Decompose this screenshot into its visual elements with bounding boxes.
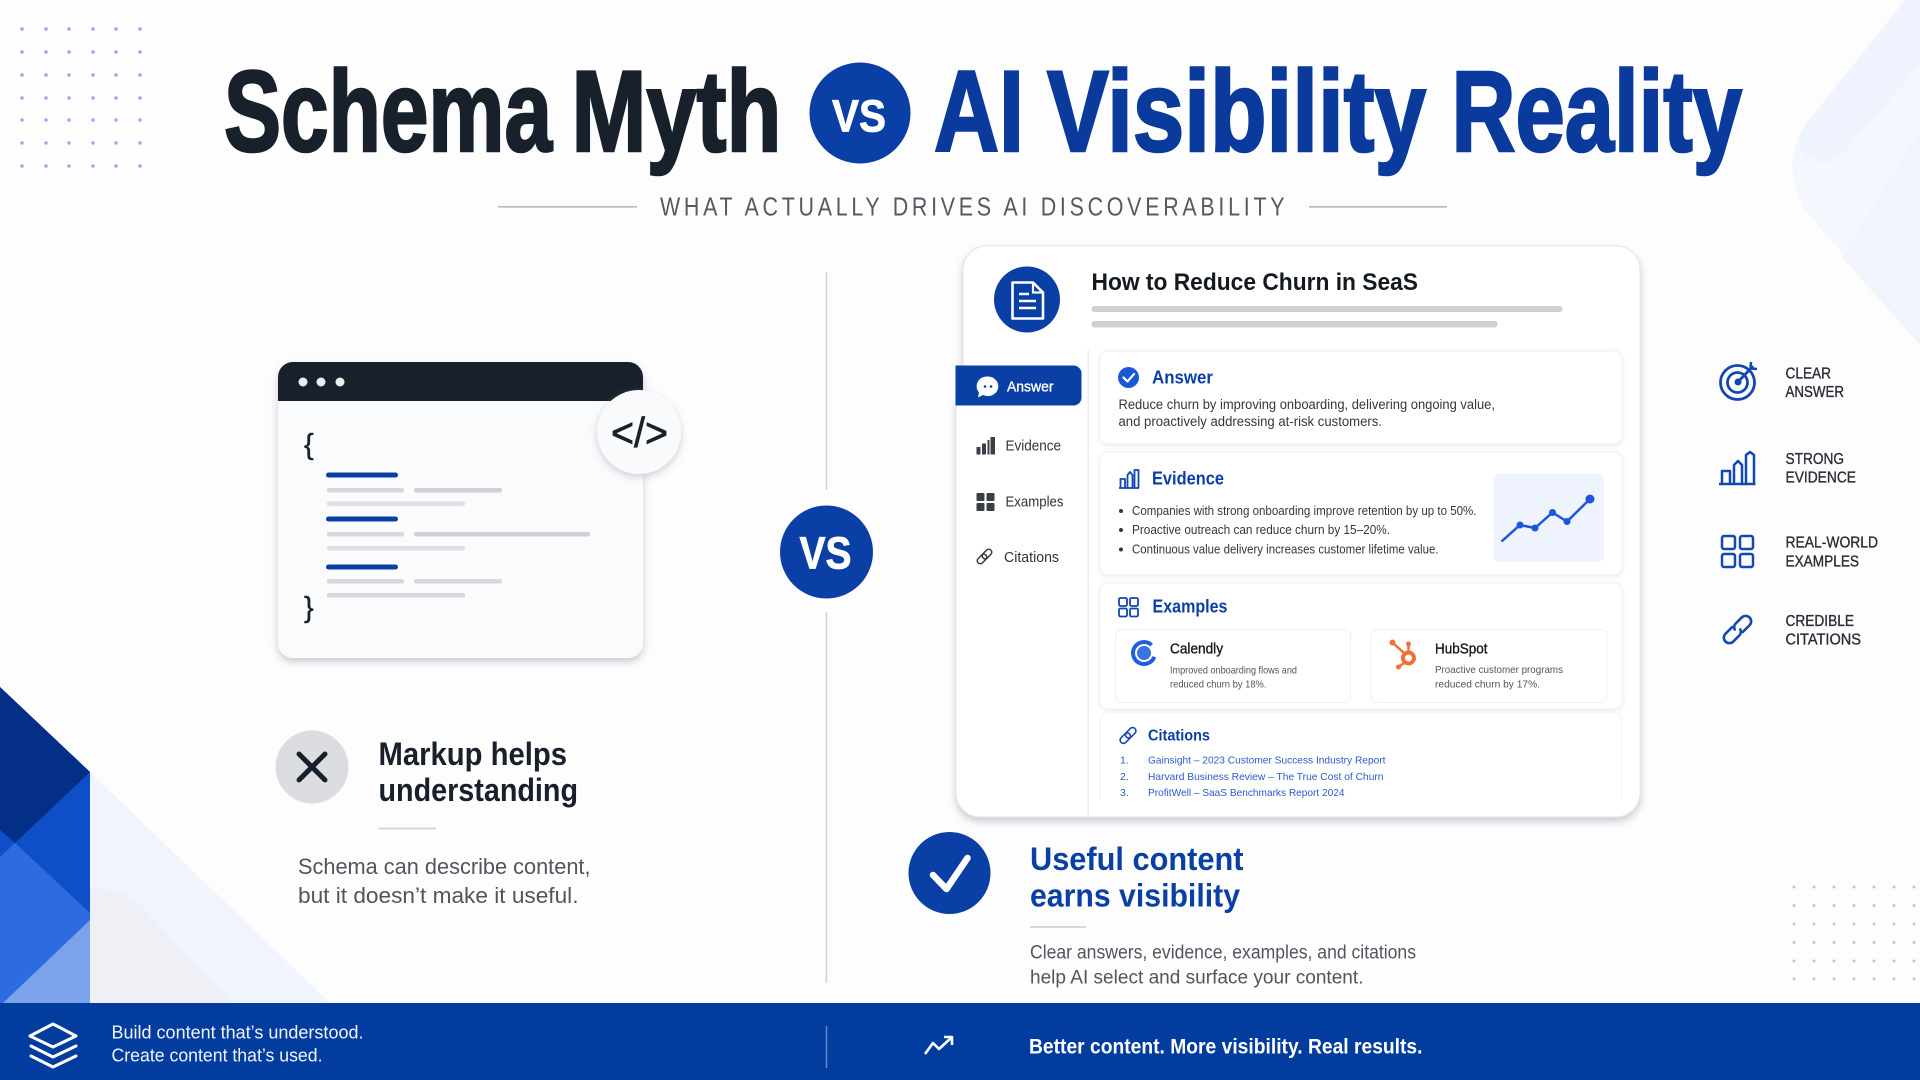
citation list: ProfitWell – SaaS Benchmarks Report 2024 bbox=[1148, 787, 1345, 799]
code lines bbox=[326, 472, 590, 598]
heading: Markup helps bbox=[378, 736, 567, 772]
evidence bullets: Proactive outreach can reduce churn by 15–20%. bbox=[1132, 523, 1390, 537]
heading: Citations bbox=[1148, 728, 1210, 744]
body text bbox=[298, 854, 590, 908]
feature: real-world examples: REAL-WORLD bbox=[1786, 534, 1878, 552]
decoration: top-left dot grid bbox=[20, 27, 142, 168]
answer text: and proactively addressing at-risk customers. bbox=[1118, 414, 1382, 429]
example card: calendly: Improved onboarding flows and bbox=[1170, 664, 1297, 676]
footer left text: Build content that’s understood. bbox=[112, 1022, 364, 1042]
evidence bullets: Companies with strong onboarding improve retention by up to 50%. bbox=[1132, 504, 1476, 518]
icon: trend arrow bbox=[925, 1037, 952, 1054]
icon: target bbox=[1720, 362, 1757, 400]
sidebar: examples tab bbox=[976, 493, 1064, 511]
feature: clear answer: ANSWER bbox=[1786, 384, 1844, 401]
icon: grid bbox=[1119, 598, 1138, 616]
section: evidence bbox=[1100, 452, 1622, 575]
card title: How to Reduce Churn in SeaS bbox=[1092, 269, 1418, 296]
body text: help AI select and surface your content. bbox=[1030, 968, 1364, 988]
heading: understanding bbox=[378, 772, 578, 808]
evidence bullets: Continuous value delivery increases customer lifetime value. bbox=[1132, 542, 1438, 556]
window body bbox=[278, 362, 643, 658]
title: ai visibility reality: AI bbox=[934, 48, 1024, 176]
subtitle: WHAT ACTUALLY DRIVES AI DISCOVERABILITY bbox=[660, 193, 1285, 221]
icon: link bbox=[1119, 726, 1137, 745]
code tag badge: </> bbox=[611, 409, 668, 456]
window title bar bbox=[278, 362, 643, 401]
footer left text bbox=[112, 1022, 364, 1066]
icon: check bbox=[908, 832, 990, 914]
example card: hubspot bbox=[1371, 630, 1607, 702]
example card: hubspot: reduced churn by 17%. bbox=[1435, 678, 1540, 690]
icon: bars bbox=[1119, 470, 1139, 488]
heading: Answer bbox=[1152, 368, 1213, 388]
code closing brace: } bbox=[304, 592, 314, 624]
feature: strong evidence bbox=[1719, 451, 1856, 486]
decoration: bottom-left geometric shapes bbox=[0, 687, 330, 1003]
sidebar: citations tab: Citations bbox=[1004, 550, 1059, 566]
title: schema myth: Myth bbox=[572, 48, 782, 176]
citation list: 3. bbox=[1120, 787, 1129, 799]
center divider with vs badge bbox=[780, 272, 873, 983]
section: examples bbox=[1100, 583, 1622, 709]
line chart bbox=[1494, 474, 1604, 562]
feature: clear answer: CLEAR bbox=[1786, 366, 1831, 382]
icon: layers bbox=[30, 1024, 76, 1067]
icon: document bbox=[994, 266, 1060, 332]
example card: hubspot: HubSpot bbox=[1435, 642, 1488, 658]
feature: credible citations: CREDIBLE bbox=[1786, 613, 1854, 630]
card background bbox=[956, 246, 1640, 817]
logo: calendly bbox=[1130, 639, 1158, 667]
body text bbox=[1030, 942, 1416, 988]
panel: content document card bbox=[956, 246, 1640, 817]
feature: clear answer bbox=[1720, 362, 1844, 401]
feature: credible citations: CITATIONS bbox=[1786, 632, 1861, 648]
center divider with vs badge: VS bbox=[800, 528, 852, 578]
section: answer bbox=[1100, 351, 1622, 444]
decoration: bottom-right dot grid bbox=[1792, 886, 1916, 980]
citation list: Harvard Business Review – The True Cost of Churn bbox=[1148, 771, 1384, 783]
title: schema myth: Schema bbox=[224, 48, 553, 176]
callout: markup helps understanding bbox=[276, 730, 590, 908]
body text: but it doesn’t make it useful. bbox=[298, 883, 578, 908]
heading bbox=[378, 736, 578, 808]
panel: code window bbox=[278, 362, 681, 658]
citation list: 2. bbox=[1120, 771, 1129, 783]
feature: real-world examples: EXAMPLES bbox=[1786, 554, 1859, 570]
icon: link bbox=[1722, 614, 1753, 645]
panel: right feature list bbox=[1719, 362, 1878, 648]
example card: calendly bbox=[1116, 630, 1350, 702]
title: vs badge: VS bbox=[832, 90, 886, 142]
sidebar: answer tab bbox=[956, 366, 1082, 406]
footer bar bbox=[0, 1003, 1920, 1080]
sidebar: examples tab: Examples bbox=[1006, 494, 1064, 510]
logo: hubspot bbox=[1390, 640, 1414, 670]
sidebar: evidence tab: Evidence bbox=[1006, 438, 1061, 454]
body text: Clear answers, evidence, examples, and citations bbox=[1030, 942, 1416, 964]
feature: credible citations bbox=[1722, 613, 1861, 648]
footer right text: Better content. More visibility. Real results. bbox=[1029, 1036, 1422, 1058]
example card: calendly: Calendly bbox=[1170, 642, 1224, 658]
code opening brace: { bbox=[304, 429, 314, 461]
icon: x mark bbox=[276, 730, 348, 804]
feature: real-world examples bbox=[1722, 534, 1878, 570]
example card: hubspot: Proactive customer programs bbox=[1435, 664, 1563, 676]
heading bbox=[1030, 841, 1244, 914]
heading: Examples bbox=[1152, 596, 1228, 616]
sidebar rule bbox=[1088, 350, 1089, 816]
evidence bullets bbox=[1119, 504, 1476, 556]
answer text: Reduce churn by improving onboarding, delivering ongoing value, bbox=[1118, 397, 1495, 412]
footer left text: Create content that’s used. bbox=[112, 1044, 322, 1066]
title bbox=[224, 48, 1742, 176]
title placeholder lines bbox=[1092, 306, 1562, 328]
sidebar: citations tab bbox=[976, 548, 1059, 566]
heading: Useful content bbox=[1030, 841, 1244, 877]
callout: useful content earns visibility bbox=[908, 832, 1416, 988]
heading: Evidence bbox=[1152, 468, 1224, 488]
citation list: 1. bbox=[1120, 754, 1129, 766]
body text: Schema can describe content, bbox=[298, 854, 590, 879]
icon: check badge bbox=[1118, 367, 1139, 388]
feature: strong evidence: STRONG bbox=[1786, 451, 1844, 468]
answer text bbox=[1118, 397, 1495, 429]
sidebar: answer tab: Answer bbox=[1007, 380, 1054, 396]
icon: bars bbox=[1719, 452, 1756, 484]
code tag badge bbox=[597, 390, 681, 474]
title: vs badge bbox=[810, 62, 910, 164]
title: ai visibility reality: Reality bbox=[1452, 48, 1742, 176]
decoration: top-right pale shapes bbox=[1792, 0, 1920, 345]
icon: grid bbox=[1722, 536, 1753, 567]
sidebar: evidence tab bbox=[976, 437, 1061, 454]
example card: calendly: reduced churn by 18%. bbox=[1170, 678, 1266, 690]
heading: earns visibility bbox=[1030, 878, 1240, 914]
title: ai visibility reality bbox=[934, 48, 1742, 176]
citation list bbox=[1120, 754, 1386, 799]
title: ai visibility reality: Visibility bbox=[1047, 48, 1426, 176]
citation list: Gainsight – 2023 Customer Success Industry Report bbox=[1148, 754, 1386, 766]
section: citations bbox=[1100, 713, 1622, 800]
window dots bbox=[298, 378, 344, 386]
feature: strong evidence: EVIDENCE bbox=[1786, 470, 1856, 486]
